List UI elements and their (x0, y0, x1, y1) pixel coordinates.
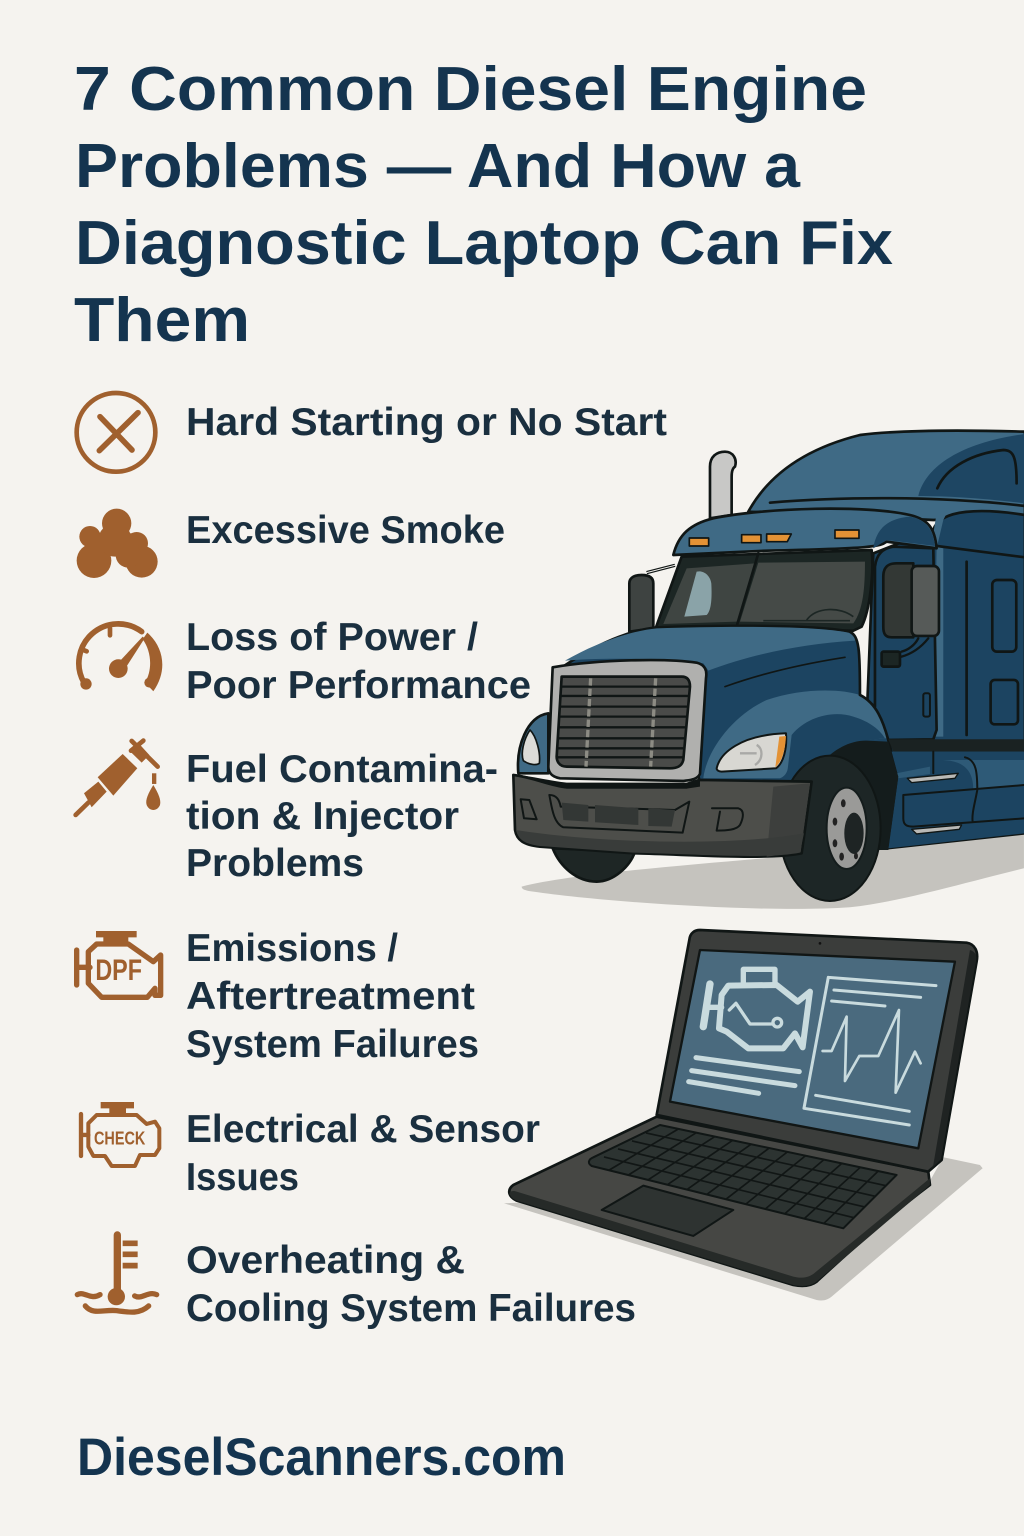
text: overheating: Overheating & (186, 1239, 465, 1282)
title (74, 55, 894, 355)
illustration: diagnostic laptop (504, 930, 983, 1301)
icon: gauge (79, 624, 162, 691)
cab door and body (553, 547, 937, 850)
text: electrical: Issues (186, 1156, 299, 1199)
laptop shadow (504, 1157, 983, 1301)
text: fuel contamination: Problems (186, 842, 364, 885)
text: fuel contamination: tion & Injector (186, 795, 459, 838)
headlight (717, 733, 786, 772)
left wheel (553, 848, 635, 882)
icon: smoke cloud (77, 509, 158, 578)
text: overheating (186, 1239, 636, 1330)
screen text lines (689, 1058, 799, 1093)
screen chart panel (804, 977, 936, 1125)
side lamp (518, 713, 548, 773)
text: electrical: Electrical & Sensor (186, 1108, 540, 1151)
text: loss of power: Poor Performance (186, 664, 531, 707)
laptop lid (657, 930, 977, 1172)
keyboard (589, 1125, 897, 1228)
text: emissions: System Failures (186, 1023, 479, 1066)
title: Problems — And How a (75, 132, 801, 201)
text: fuel contamination (186, 748, 498, 885)
sleeper body (867, 511, 1024, 848)
laptop base (509, 1117, 930, 1286)
illustration: semi truck (513, 431, 1024, 909)
fender (703, 690, 887, 778)
text: loss of power: Loss of Power / (186, 616, 478, 659)
ground shadow (522, 830, 1024, 909)
icon: CHECK engine: CHECK (94, 1128, 146, 1149)
text: emissions (186, 927, 479, 1066)
icon: DPF engine: DPF (95, 954, 142, 987)
title: Them (74, 286, 250, 355)
visor and amber marker lights (673, 509, 937, 555)
text: fuel contamination: Fuel Contamina- (186, 748, 498, 791)
left mirror (629, 565, 675, 632)
icon: coolant thermometer (77, 1235, 157, 1312)
grille surround (548, 660, 706, 781)
icon: CHECK engine (81, 1102, 159, 1166)
icon: fuel injector (76, 741, 160, 815)
text: emissions: Emissions / (186, 927, 398, 970)
grille (557, 677, 690, 768)
fairing shaded side (918, 434, 1024, 503)
icon: no start circled x (77, 393, 155, 472)
text: emissions: Aftertreatment (186, 975, 475, 1018)
text: hard starting: Hard Starting or No Start (186, 401, 667, 444)
black frame rail (888, 739, 1024, 752)
exhaust stack (710, 452, 736, 518)
brand footer: DieselScanners.com (77, 1428, 566, 1487)
title: 7 Common Diesel Engine (74, 55, 867, 124)
icon: DPF engine (77, 931, 161, 997)
side window and mirror (882, 563, 939, 717)
text: electrical (186, 1108, 540, 1199)
front wheel (779, 741, 898, 901)
bumper (513, 774, 812, 857)
laptop screen (670, 950, 955, 1148)
touchpad (602, 1186, 733, 1236)
text: overheating: Cooling System Failures (186, 1287, 636, 1330)
hood highlight (565, 627, 855, 671)
text: excessive smoke: Excessive Smoke (186, 509, 505, 552)
text: loss of power (186, 616, 531, 707)
lower skirt and steps (888, 752, 1024, 848)
title: Diagnostic Laptop Can Fix (75, 209, 894, 278)
screen engine icon (703, 969, 810, 1048)
rear air fairing (748, 431, 1024, 520)
windshield (656, 550, 872, 631)
